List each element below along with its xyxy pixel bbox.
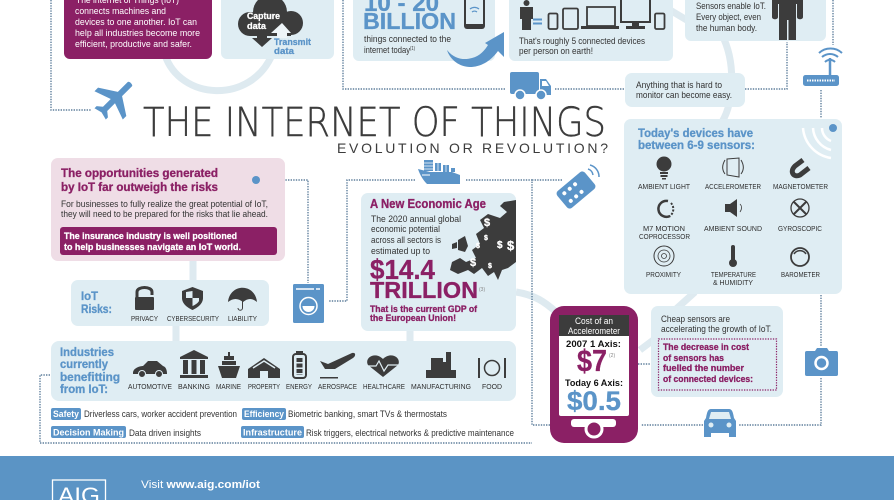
map: Europe: $ <box>476 243 480 250</box>
industry: banking: BANKING <box>178 384 210 391</box>
industry: marine <box>216 352 241 391</box>
panel: today's devices sensors <box>624 119 842 294</box>
tag row: efficiency: Efficiency <box>244 409 285 419</box>
tag row: infrastructure <box>241 426 514 438</box>
panel: 10 to 20 billion things <box>353 0 495 61</box>
panel: today's devices sensors: between 6-9 sensors: <box>638 140 755 152</box>
industry: manufacturing: MANUFACTURING <box>411 384 471 391</box>
industry: aerospace <box>318 353 357 391</box>
tag row: infrastructure: Infrastructure <box>243 428 302 438</box>
map: Europe: $ <box>507 238 515 253</box>
panel: new economic age: That is the current GDP of <box>370 304 478 315</box>
panel: connected devices per person <box>509 0 673 61</box>
panel: today's devices sensors: Today's devices have <box>638 128 753 140</box>
map: Europe: $ <box>488 263 492 270</box>
panel: hard to monitor: monitor can become easy. <box>636 90 732 100</box>
sensor: magnetometer: MAGNETOMETER <box>773 184 828 191</box>
panel: hard to monitor <box>625 73 745 107</box>
sensor: ambient sound <box>704 199 762 233</box>
callout: decrease in cost <box>658 339 776 390</box>
panel: IoT risks: IoT <box>81 289 99 303</box>
callout: decrease in cost: The decrease in cost <box>663 342 750 353</box>
callout: decrease in cost: of connected devices: <box>663 374 753 385</box>
sensor: accelerometer <box>705 158 761 191</box>
icon: remote control <box>555 165 599 210</box>
panel: industries benefitting: benefitting <box>60 370 120 384</box>
icon: cloud <box>238 0 303 47</box>
panel: 10 to 20 billion things: BILLION <box>363 8 456 34</box>
panel: new economic age: estimated up to <box>371 246 430 256</box>
panel: capture and transmit data: data <box>274 46 295 57</box>
panel: industries benefitting <box>51 341 516 401</box>
sensor: ambient light <box>638 156 691 191</box>
sensor: temperature and humidity <box>711 245 756 287</box>
industry: energy <box>286 351 312 391</box>
panel: opportunities vs risks: The opportunities generated <box>61 166 218 180</box>
link text: Visit www.aig.com/iot <box>141 479 260 491</box>
tag row: efficiency <box>242 408 447 420</box>
panel: new economic age <box>361 193 516 331</box>
panel: new economic age: The 2020 annual global <box>371 214 461 224</box>
panel: 10 to 20 billion things: internet today <box>364 45 420 55</box>
icon: car <box>704 409 736 437</box>
industry: aerospace: AEROSPACE <box>318 384 357 391</box>
sensor: accelerometer: ACCELEROMETER <box>705 184 761 191</box>
map: Europe <box>450 200 516 280</box>
sensor: temperature and humidity: TEMPERATURE <box>711 272 756 279</box>
panel: cheap sensors <box>651 306 783 397</box>
map: Europe: $ <box>484 235 488 242</box>
sensor: motion coprocessor <box>639 201 690 241</box>
sensor: proximity <box>646 246 681 279</box>
panel: new economic age: (3) <box>479 287 485 293</box>
panel: accelerometer cost phone: Cost of an <box>575 316 613 326</box>
panel: new economic age: across all sectors is <box>371 235 441 245</box>
icon: smartphone <box>464 0 485 29</box>
sensor: temperature and humidity: & HUMIDITY <box>713 280 753 287</box>
panel: capture and transmit data <box>221 0 334 59</box>
icon: human body <box>772 0 803 40</box>
industry: healthcare: HEALTHCARE <box>363 384 405 391</box>
icon: privacy lock: PRIVACY <box>131 316 158 323</box>
map: Europe: $ <box>484 217 490 229</box>
industry: property <box>248 358 280 391</box>
panel: accelerometer cost phone: Today 6 Axis: <box>565 378 623 389</box>
icon: cargo ship <box>418 160 460 184</box>
tag row: decision making: Data driven insights <box>129 428 201 438</box>
panel: what is IoT: devices to one another. IoT can <box>75 17 197 27</box>
callout: decrease in cost: fuelled the number <box>663 363 744 374</box>
panel: what is IoT <box>64 0 212 59</box>
icon: privacy lock <box>131 288 158 323</box>
tag row: decision making <box>51 426 201 438</box>
panel: 10 to 20 billion things: (1) <box>410 46 415 52</box>
map: Europe: $ <box>497 240 503 251</box>
industry: automotive <box>128 361 172 391</box>
callout: decrease in cost: of sensors has <box>663 353 724 364</box>
industry: food <box>479 358 505 391</box>
icon: cybersecurity shield <box>167 287 219 323</box>
panel: capture and transmit data: data <box>247 21 267 32</box>
panel: opportunities vs risks: by IoT far outweigh the risks <box>61 180 218 194</box>
icon: cybersecurity shield: CYBERSECURITY <box>167 316 219 323</box>
footer band <box>0 456 894 500</box>
panel: new economic age: A New Economic Age <box>370 197 486 211</box>
panel: capture and transmit data: Capture <box>247 11 280 22</box>
panel: what is IoT: connects machines and <box>75 6 166 16</box>
sensor: magnetometer <box>773 160 828 191</box>
panel: sensors enable IoT: the human body. <box>696 23 757 33</box>
panel: accelerometer cost phone: 2007 1 Axis: <box>566 339 621 350</box>
panel: connected devices per person: That's roughly 5 connected devices <box>519 36 645 46</box>
panel: new economic age: $14.4 <box>370 254 436 285</box>
callout: insurance industry: to help businesses navigate an IoT world. <box>64 242 241 253</box>
icon: liability umbrella <box>228 288 257 323</box>
industry: healthcare <box>363 355 405 391</box>
industry: manufacturing <box>411 352 471 391</box>
sensor: ambient sound: AMBIENT SOUND <box>704 226 762 233</box>
sensor: gyroscopic: GYROSCOPIC <box>778 226 822 233</box>
tag row: safety: Driverless cars, worker accident prevention <box>84 409 237 419</box>
icon: signal corner <box>803 124 837 158</box>
sensor: gyroscopic <box>778 199 822 233</box>
icon: home button <box>571 419 616 437</box>
arrow: swoop <box>447 32 504 67</box>
panel: cheap sensors: accelerating the growth of IoT. <box>661 324 772 334</box>
panel: opportunities vs risks <box>51 158 285 261</box>
industry: automotive: AUTOMOTIVE <box>128 384 172 391</box>
panel: industries benefitting: Industries <box>60 345 114 359</box>
sensor: barometer <box>781 248 820 279</box>
tag row: infrastructure: Risk triggers, electrical networks & predictive maintenance <box>306 428 514 438</box>
industry: banking <box>178 350 210 391</box>
panel: accelerometer cost phone: $0.5 <box>567 386 621 416</box>
panel: industries benefitting: from IoT: <box>60 382 108 396</box>
icon: liability umbrella: LIABILITY <box>228 316 257 323</box>
sensor: proximity: PROXIMITY <box>646 272 681 279</box>
panel: new economic age: TRILLION <box>370 277 478 303</box>
panel: opportunities vs risks: For businesses to fully realize the great potential of IoT, <box>61 199 268 209</box>
panel: new economic age: economic potential <box>371 224 440 234</box>
icon: plane <box>86 69 145 128</box>
panel: IoT risks: Risks: <box>81 302 112 316</box>
panel: what is IoT: efficient, productive and safer. <box>75 39 192 49</box>
sensor: ambient light: AMBIENT LIGHT <box>638 184 691 191</box>
tag row: efficiency: Biometric banking, smart TVs & thermostats <box>288 409 447 419</box>
callout: insurance industry: The insurance industry is well positioned <box>64 231 237 242</box>
panel: sensors enable IoT <box>685 0 826 41</box>
panel: IoT risks <box>71 280 269 326</box>
panel: accelerometer cost phone: Accelerometer <box>568 326 620 336</box>
tag row: safety <box>51 408 237 420</box>
tag row: decision making: Decision Making <box>53 428 124 438</box>
icon: camera <box>805 348 838 376</box>
panel: connected devices per person: per person on earth! <box>519 46 593 56</box>
sensor: motion coprocessor: M7 MOTION <box>643 226 685 233</box>
panel: what is IoT: help all industries become more <box>75 28 200 38</box>
callout: insurance industry <box>60 227 277 255</box>
industry: food: FOOD <box>482 384 502 391</box>
panel: capture and transmit data: Transmit <box>274 37 312 48</box>
panel: accelerometer cost phone: (2) <box>609 353 615 359</box>
sensor: barometer: BAROMETER <box>781 272 820 279</box>
panel: accelerometer cost phone <box>550 306 638 443</box>
panel: cheap sensors: Cheap sensors are <box>661 314 730 324</box>
map: Europe: $ <box>470 257 476 269</box>
panel: accelerometer cost phone: $7 <box>577 343 607 378</box>
sensor: motion coprocessor: COPROCESSOR <box>639 234 690 241</box>
icon: washing machine <box>293 284 324 323</box>
icon: truck <box>510 72 551 100</box>
panel: opportunities vs risks: they will need to be prepared for the risks that lie ahead. <box>61 209 268 219</box>
industry: marine: MARINE <box>216 384 241 391</box>
panel: hard to monitor: Anything that is hard to <box>636 80 722 90</box>
icon: wifi router <box>803 49 842 86</box>
panel: new economic age: the European Union! <box>370 313 456 324</box>
panel: 10 to 20 billion things: things connected to the <box>364 34 451 44</box>
tag row: safety: Safety <box>53 409 80 419</box>
industry: energy: ENERGY <box>286 384 312 391</box>
logo: AIG <box>52 480 106 500</box>
panel: sensors enable IoT: Every object, even <box>696 12 761 22</box>
title: THE INTERNET OF THINGS <box>143 100 606 146</box>
subtitle: EVOLUTION OR REVOLUTION? <box>337 140 608 156</box>
industry: property: PROPERTY <box>248 384 280 391</box>
panel: sensors enable IoT: Sensors enable IoT. <box>696 1 766 11</box>
icon: person equals devices <box>520 0 664 30</box>
panel: industries benefitting: currently <box>60 357 108 371</box>
